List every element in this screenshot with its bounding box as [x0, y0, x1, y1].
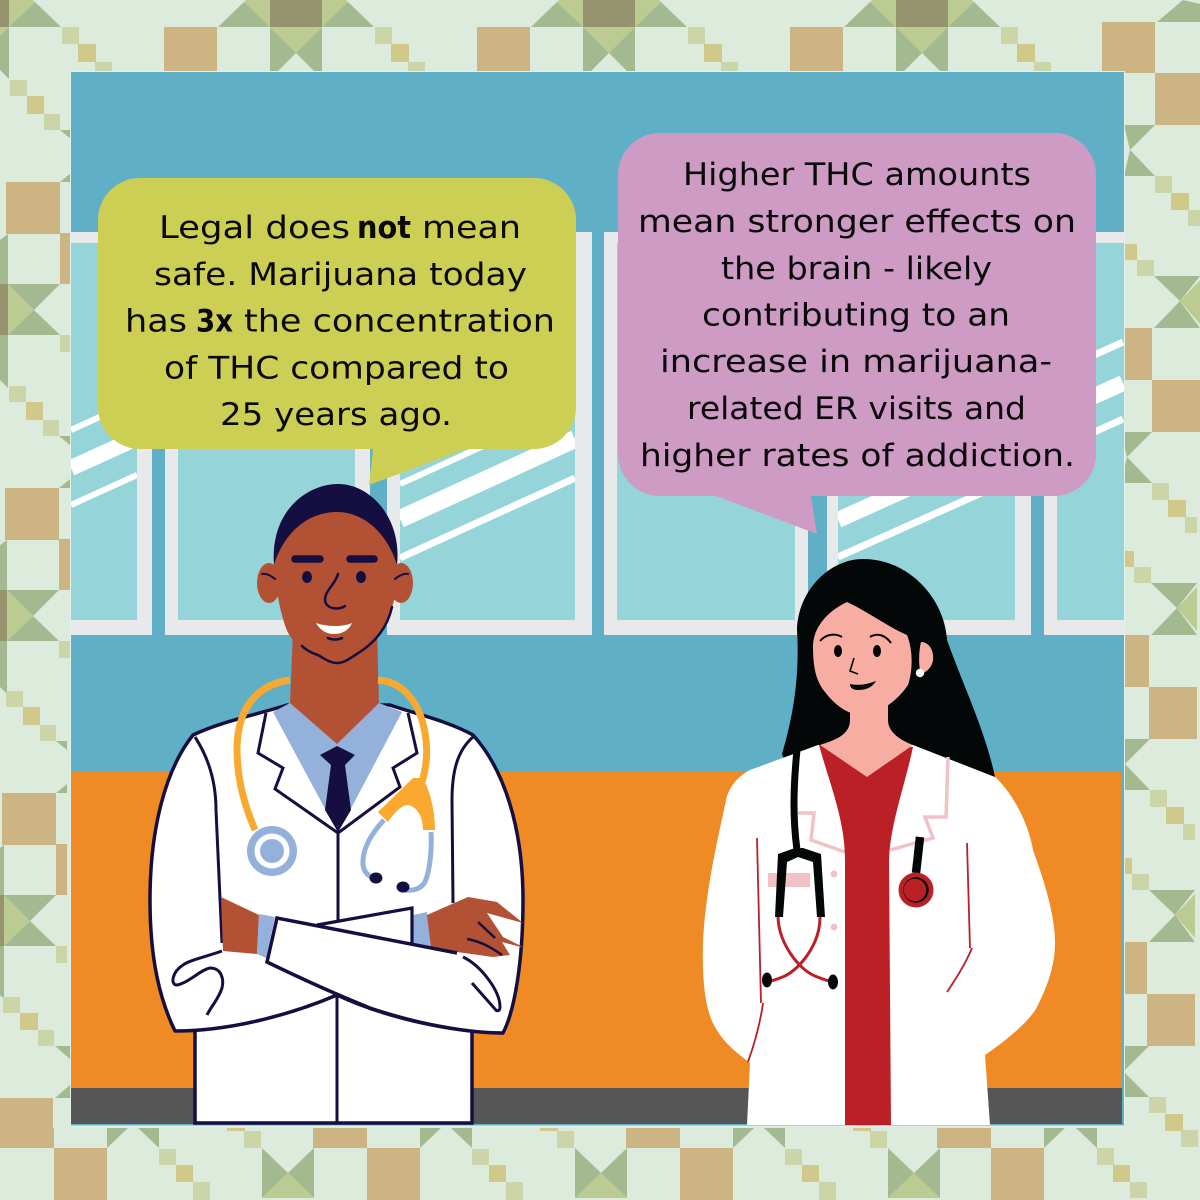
arm seams	[195, 737, 473, 943]
crossed arms	[173, 897, 525, 1033]
stethoscope ear tubes	[363, 820, 431, 890]
speech bubble: pink: increase in marijuana-	[660, 344, 1052, 380]
stethoscope yoke	[378, 778, 435, 830]
ear tips	[370, 872, 410, 892]
chest piece	[247, 826, 297, 876]
ears	[257, 563, 413, 603]
speech bubble: yellow-green: 25 years ago.	[220, 397, 452, 433]
ear and earring	[916, 642, 933, 677]
neck	[290, 630, 379, 744]
face	[274, 512, 397, 663]
coat upper body and sleeves	[150, 705, 523, 1033]
speech bubble: yellow-green: mean	[422, 210, 521, 246]
coat seam lines	[748, 838, 972, 1062]
white coat	[703, 745, 1055, 1125]
speech bubble: pink	[618, 133, 1096, 534]
name tag and buttons	[768, 870, 838, 930]
speech bubble: pink: higher rates of addiction.	[640, 438, 1075, 474]
facial features	[262, 559, 408, 663]
speech bubble: pink: related ER visits and	[687, 391, 1026, 427]
speech bubble: pink: contributing to an	[702, 298, 1010, 334]
stethoscope	[762, 750, 934, 990]
facial features	[820, 635, 891, 690]
lapels	[258, 713, 417, 833]
doctor: woman in white coat	[703, 559, 1055, 1125]
speech bubble: pink: the brain - likely	[721, 251, 992, 287]
necktie	[320, 746, 355, 832]
coat centre seam	[337, 833, 338, 1123]
doctor: man with crossed arms	[150, 484, 525, 1123]
speech bubble: yellow-green: the concentration	[244, 304, 555, 340]
speech bubble: yellow-green: safe. Marijuana today	[154, 257, 527, 293]
stethoscope tubing	[237, 680, 427, 830]
speech bubble: yellow-green: not	[357, 210, 411, 246]
shirt collar	[273, 703, 402, 833]
speech bubble: yellow-green: of THC compared to	[164, 350, 509, 386]
speech bubble: pink: Higher THC amounts	[683, 157, 1031, 193]
pink lapel details	[798, 757, 948, 852]
long black hair	[782, 559, 995, 800]
coat lower body	[195, 985, 472, 1123]
panel: hospital corridor background	[70, 71, 1125, 1127]
face	[813, 602, 912, 715]
speech bubble: yellow-green: 3x	[196, 304, 233, 340]
speech bubble: yellow-green: Legal does	[159, 210, 350, 246]
speech bubble: yellow-green	[98, 178, 576, 485]
speech bubble: yellow-green: has	[125, 304, 187, 340]
hair	[274, 484, 398, 565]
speech bubble: pink: mean stronger effects on	[638, 204, 1076, 240]
red scrubs	[819, 745, 913, 1125]
neck	[820, 700, 913, 777]
